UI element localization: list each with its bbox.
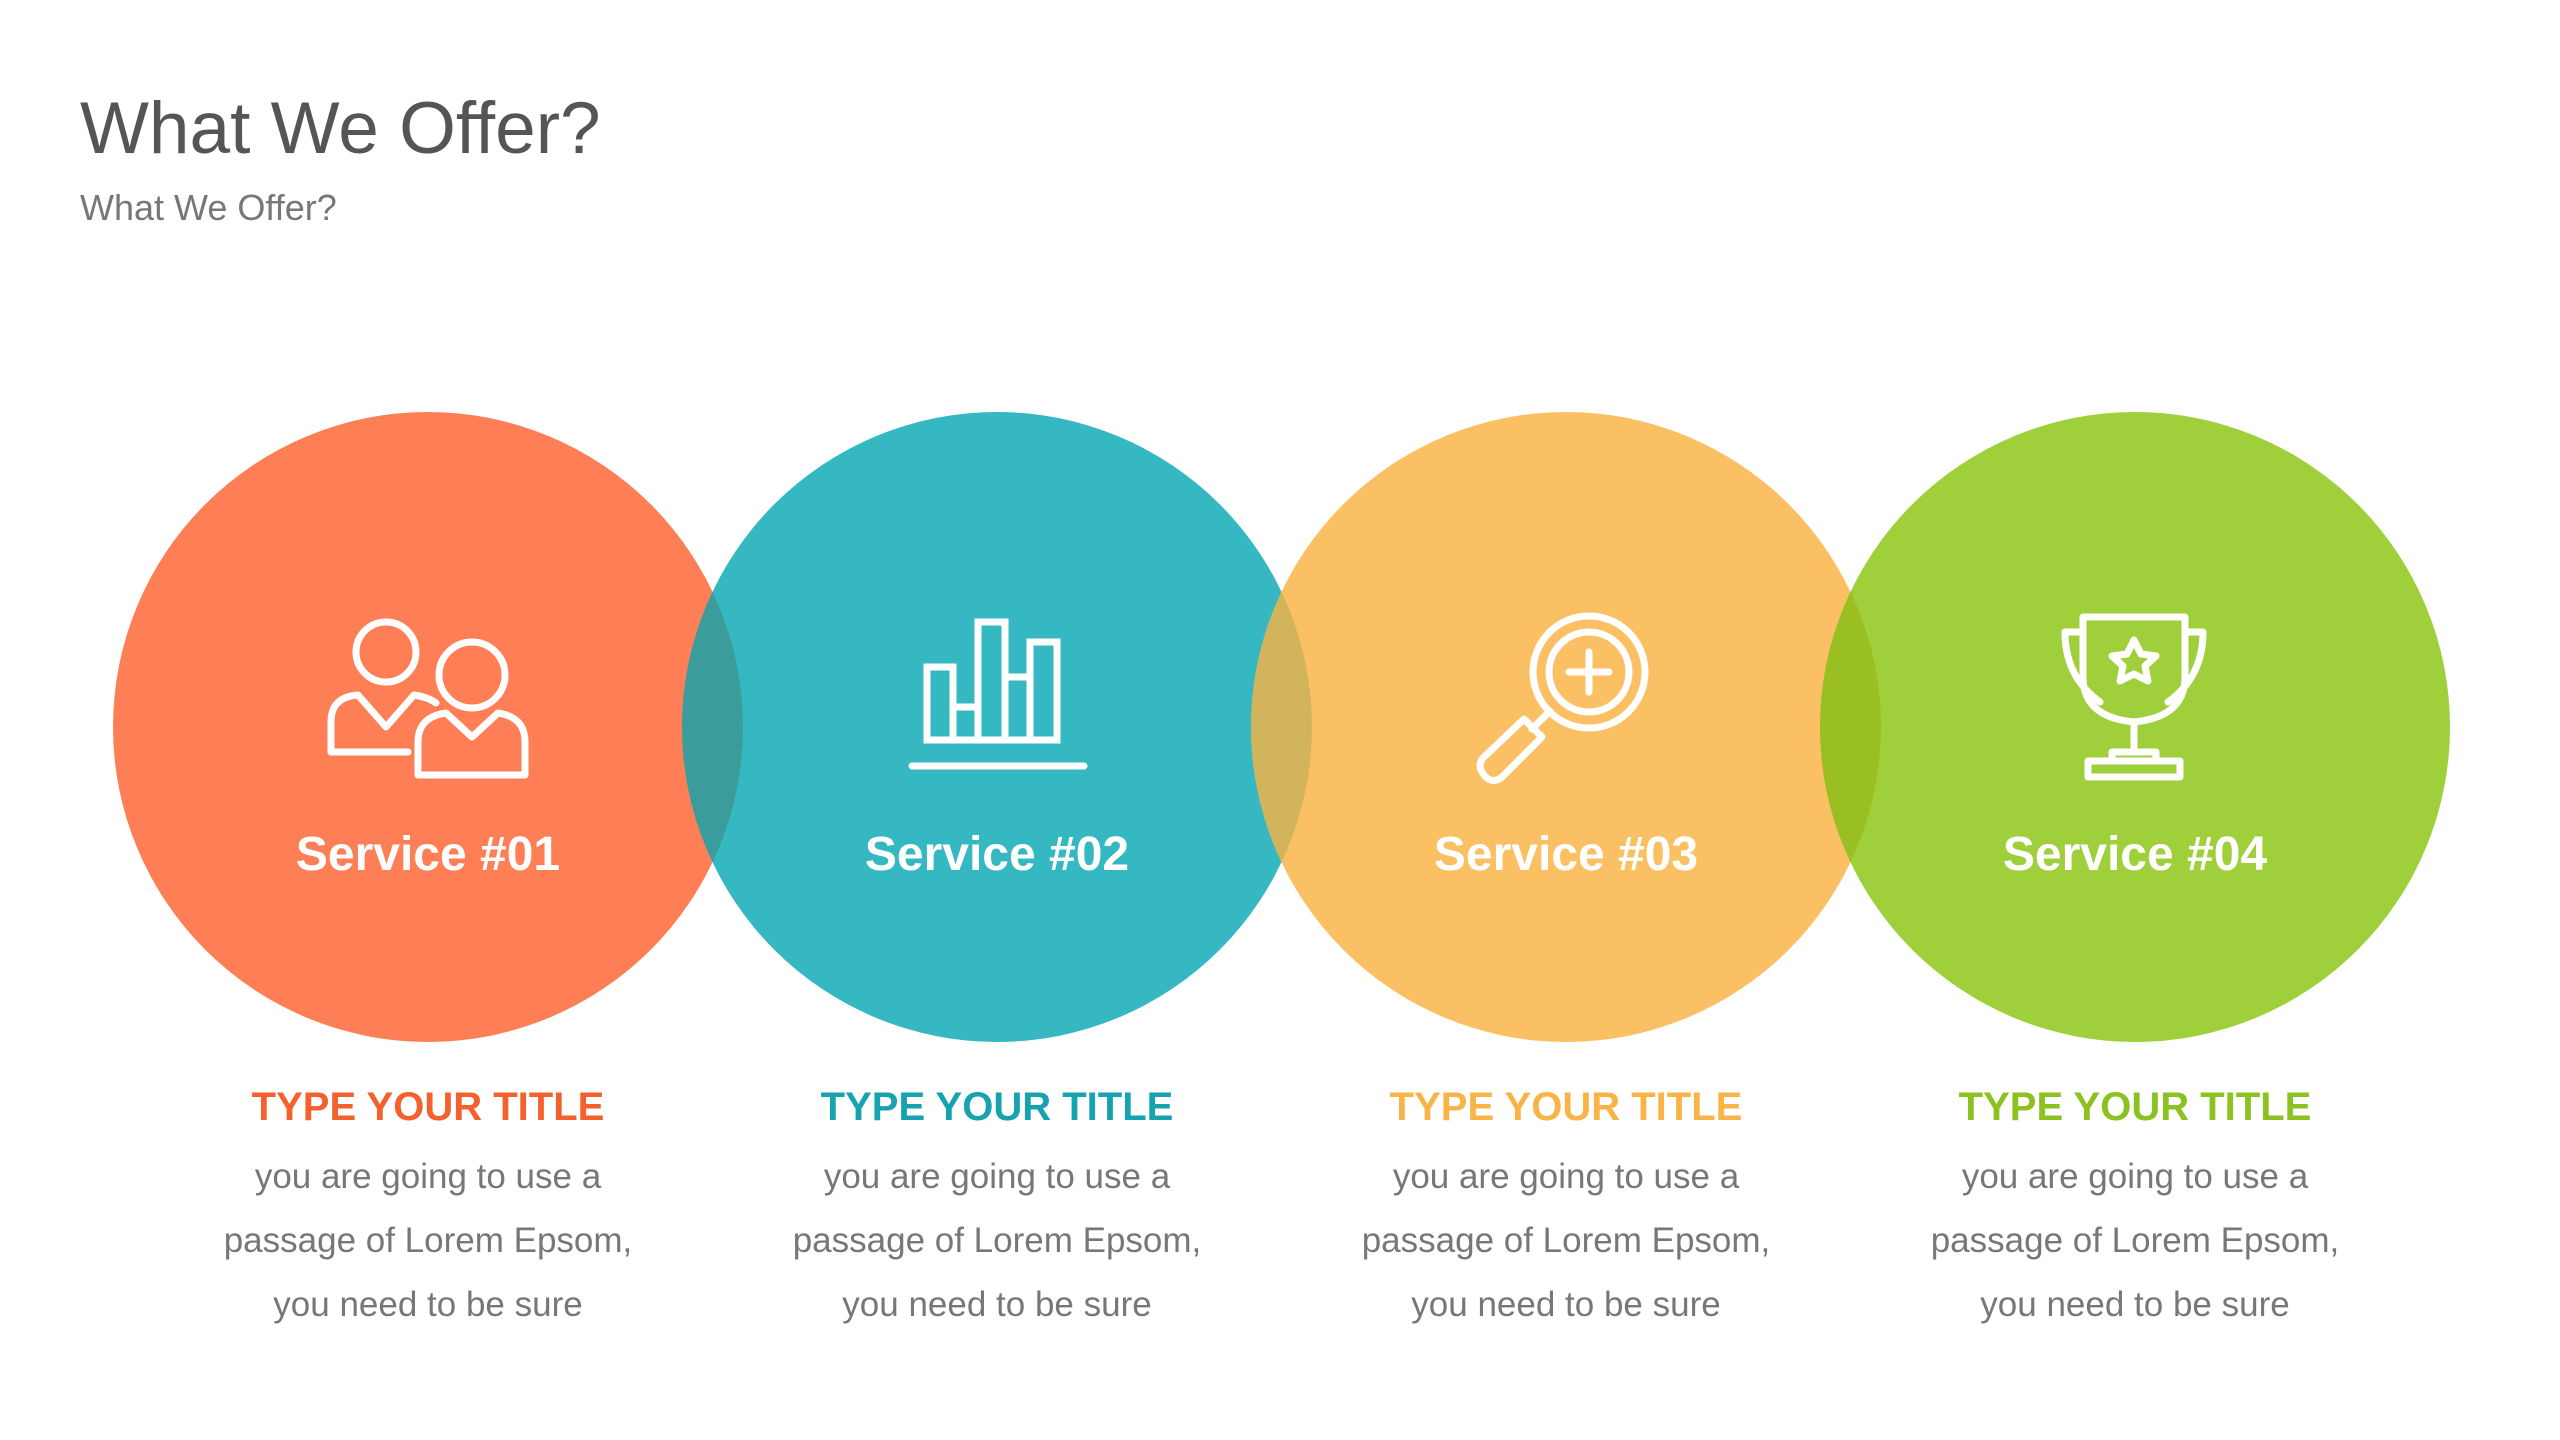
- text block 3: TYPE YOUR TITLE: [1390, 1085, 1742, 1129]
- icon: people: [331, 622, 525, 775]
- text block 4: you need to be sure: [1980, 1285, 2290, 1324]
- text block 1: TYPE YOUR TITLE: [252, 1085, 604, 1129]
- text block 2: you need to be sure: [842, 1285, 1152, 1324]
- text block 2: passage of Lorem Epsom,: [793, 1221, 1201, 1260]
- text block 3: [1362, 1085, 1770, 1324]
- subtitle: What We Offer?: [80, 187, 337, 228]
- icon: magnifier: [1480, 616, 1645, 781]
- circle: service 02: [682, 412, 1312, 1042]
- label: Service #02: Service #02: [865, 828, 1129, 881]
- text block 1: you are going to use a: [255, 1157, 602, 1196]
- text block 1: passage of Lorem Epsom,: [224, 1221, 632, 1260]
- label: Service #01: Service #01: [296, 828, 560, 881]
- text block 4: TYPE YOUR TITLE: [1959, 1085, 2311, 1129]
- text block 1: you need to be sure: [273, 1285, 583, 1324]
- circle: service 03: [1251, 412, 1881, 1042]
- text block 2: [793, 1085, 1201, 1324]
- label: Service #03: Service #03: [1434, 828, 1698, 881]
- title: What We Offer?: [80, 88, 601, 169]
- text block 1: [224, 1085, 632, 1324]
- text block 3: passage of Lorem Epsom,: [1362, 1221, 1770, 1260]
- text block 4: passage of Lorem Epsom,: [1931, 1221, 2339, 1260]
- text block 4: you are going to use a: [1962, 1157, 2309, 1196]
- circle: service 04: [1820, 412, 2450, 1042]
- text block 2: TYPE YOUR TITLE: [821, 1085, 1173, 1129]
- icon: bar chart: [912, 622, 1084, 766]
- circle: service 01: [113, 412, 743, 1042]
- text block 3: you are going to use a: [1393, 1157, 1740, 1196]
- text block 3: you need to be sure: [1411, 1285, 1721, 1324]
- text block 2: you are going to use a: [824, 1157, 1171, 1196]
- icon: trophy: [2065, 617, 2203, 777]
- text block 4: [1931, 1085, 2339, 1324]
- services diagram: [113, 412, 2450, 1324]
- label: Service #04: Service #04: [2003, 828, 2267, 881]
